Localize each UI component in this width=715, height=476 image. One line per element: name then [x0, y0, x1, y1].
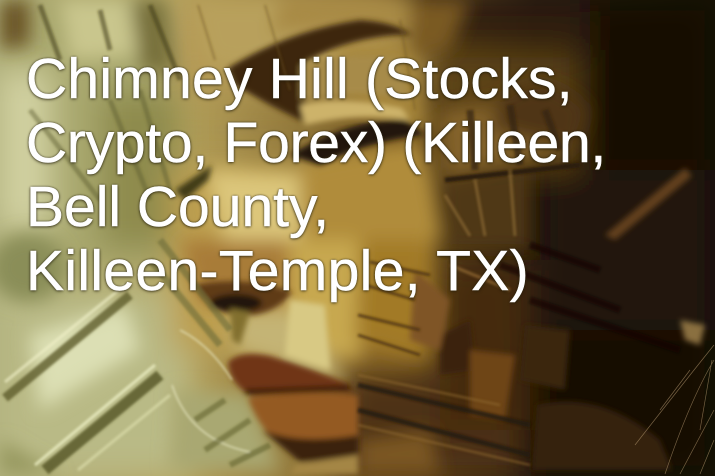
- eyebrow and socket: [228, 20, 412, 125]
- title: Chimney Hill (Stocks,: [26, 47, 573, 111]
- title: Bell County,: [26, 175, 329, 239]
- facial features: [175, 20, 705, 474]
- title: Killeen-Temple, TX): [26, 239, 529, 303]
- dark money patches: [175, 165, 212, 200]
- title: [26, 47, 606, 306]
- lips: [228, 354, 352, 396]
- dollar seal near lips: [285, 300, 330, 370]
- nose shadow: [195, 281, 292, 316]
- hair strands: [635, 345, 714, 474]
- title: Crypto, Forex) (Killeen,: [26, 111, 606, 175]
